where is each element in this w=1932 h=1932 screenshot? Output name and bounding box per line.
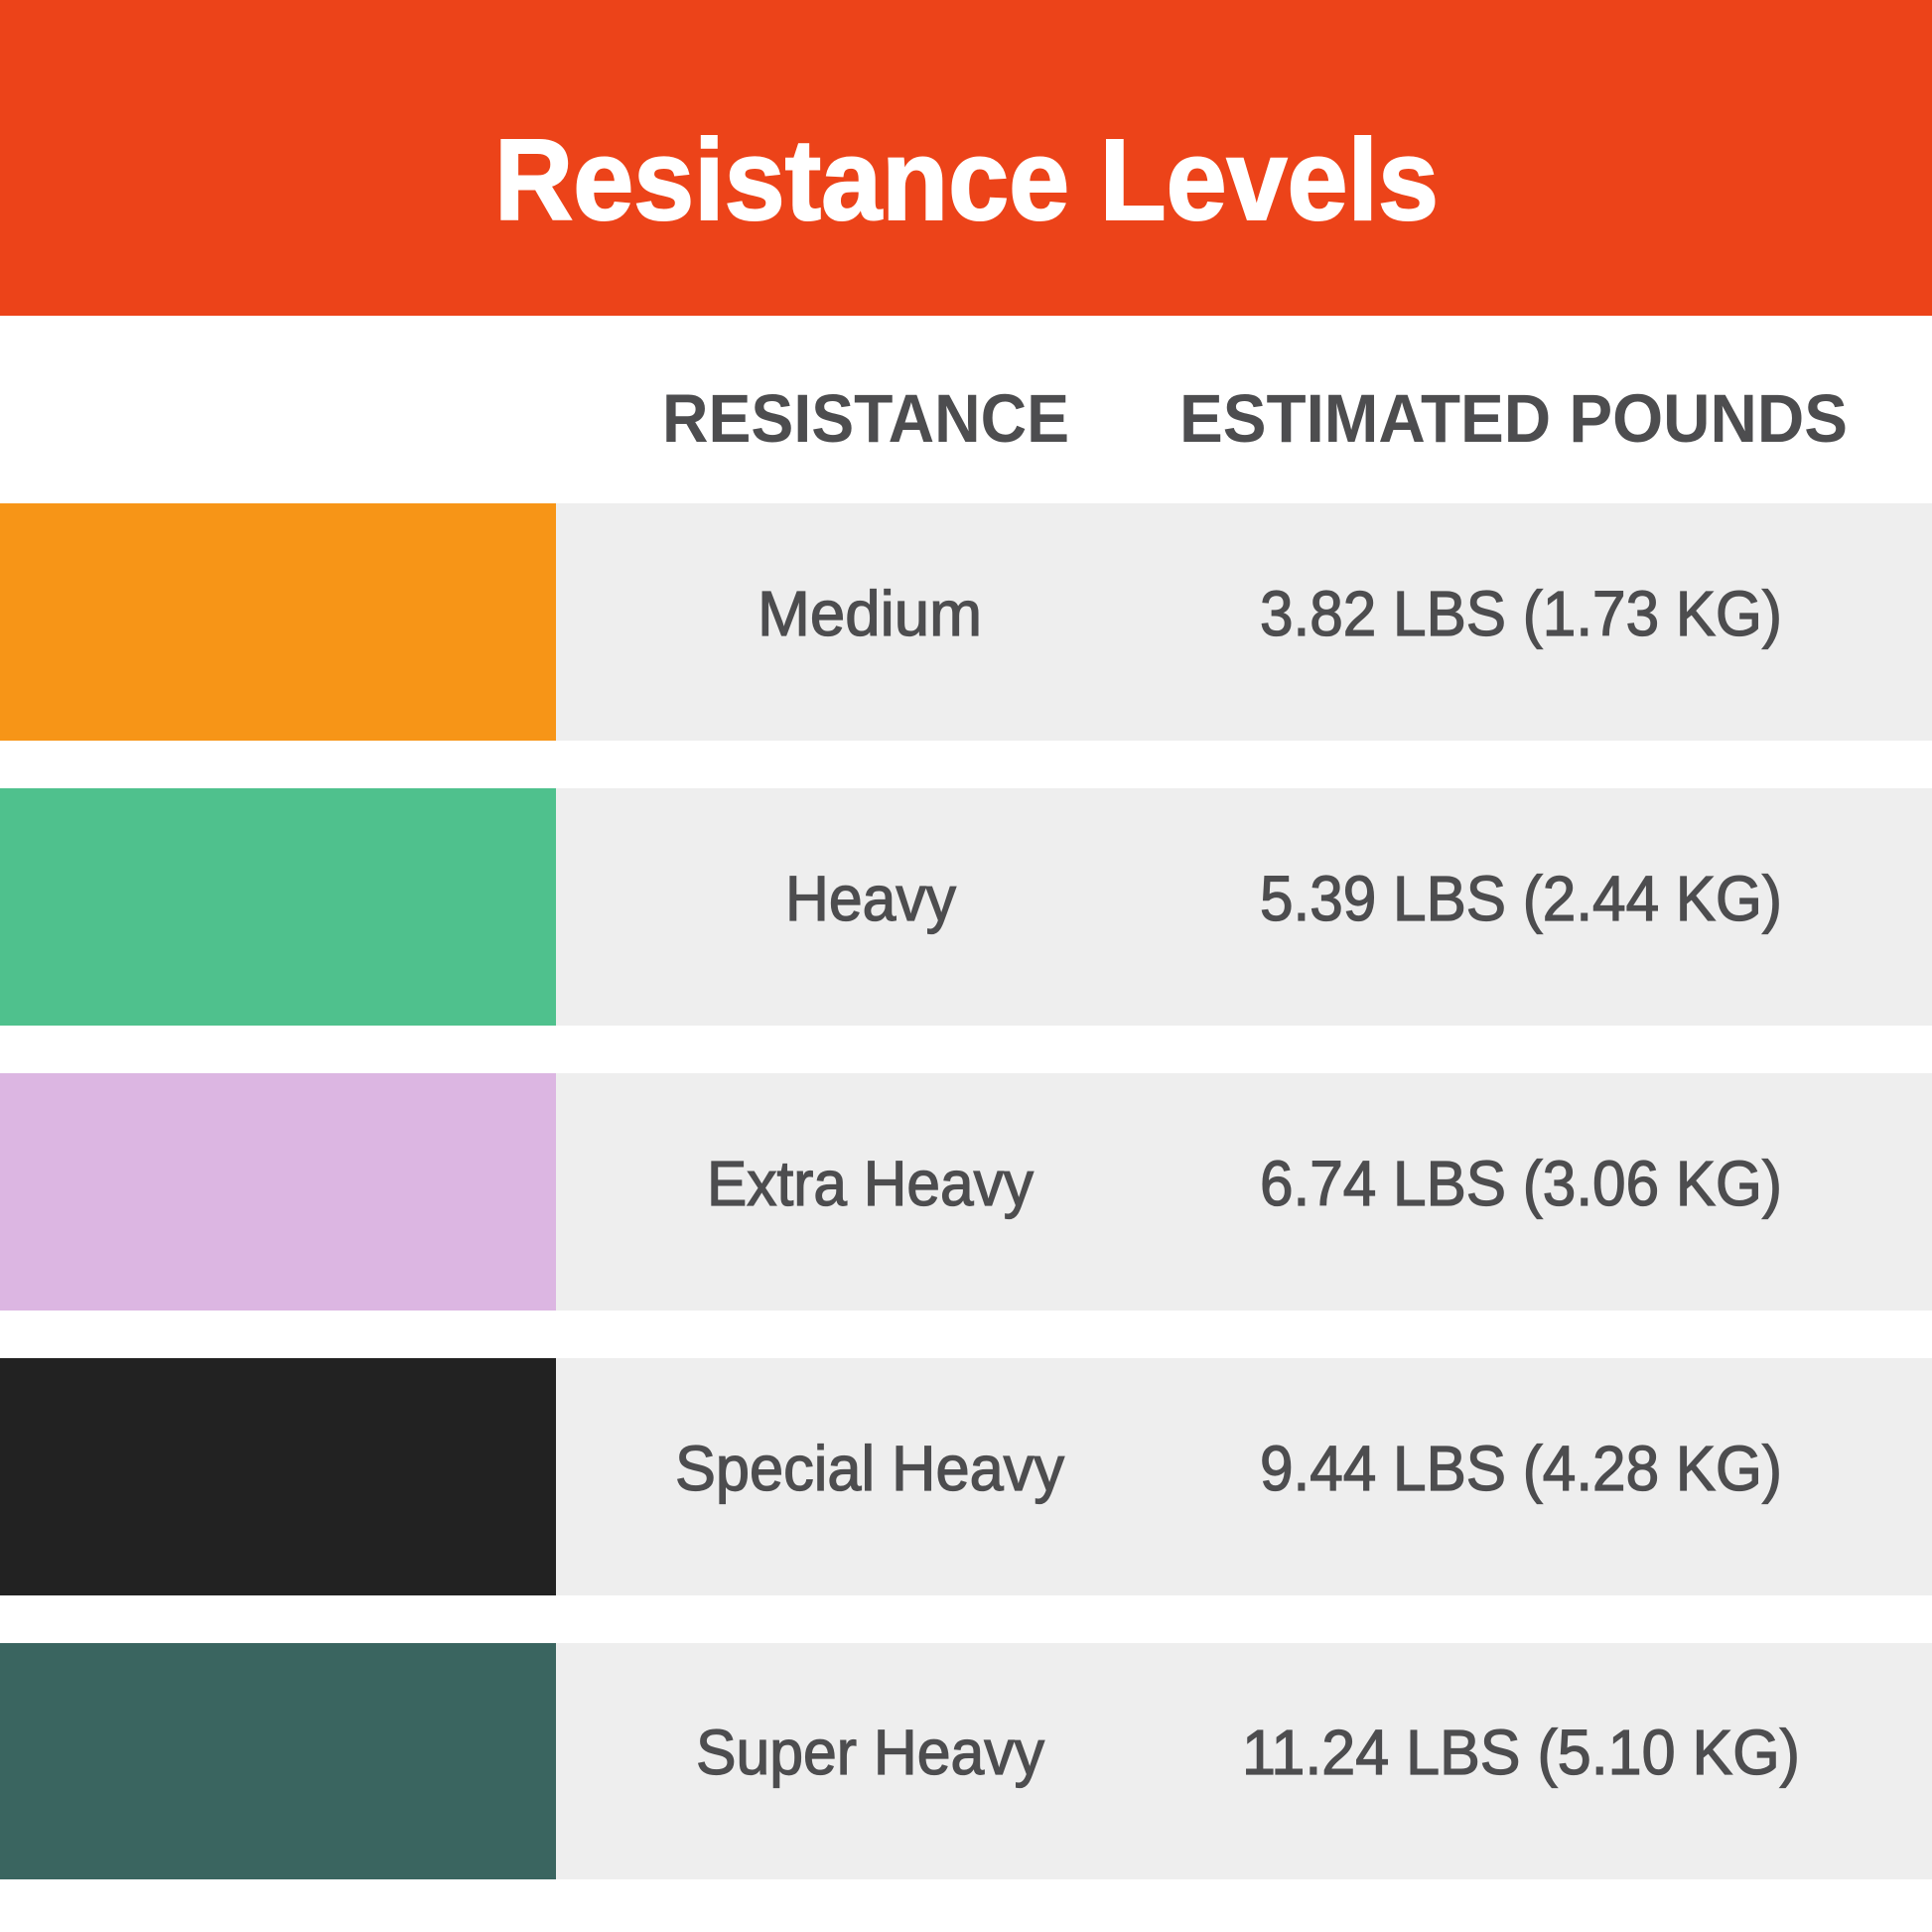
swatch: teal [0, 1643, 556, 1879]
label: medium: Medium [758, 578, 982, 649]
swatch: green [0, 788, 556, 1026]
value: extra heavy: 6.74 LBS (3.06 KG) [1260, 1148, 1782, 1219]
value: special heavy: 9.44 LBS (4.28 KG) [1260, 1433, 1782, 1504]
value: super heavy: 11.24 LBS (5.10 KG) [1242, 1717, 1800, 1788]
swatch: purple [0, 1073, 556, 1311]
label: extra heavy: Extra Heavy [707, 1148, 1034, 1219]
title: Resistance Levels [494, 115, 1439, 244]
row: special heavy [0, 1358, 1932, 1595]
column heading: resistance: RESISTANCE [662, 380, 1069, 457]
label: super heavy: Super Heavy [696, 1717, 1044, 1788]
label: special heavy: Special Heavy [675, 1433, 1064, 1504]
row: medium [0, 503, 1932, 741]
row: extra heavy [0, 1073, 1932, 1311]
column heading: estimated pounds: ESTIMATED POUNDS [1179, 380, 1848, 457]
value: medium: 3.82 LBS (1.73 KG) [1260, 578, 1782, 649]
row: heavy [0, 788, 1932, 1026]
swatch: orange [0, 503, 556, 741]
label: heavy: Heavy [785, 863, 956, 934]
value: heavy: 5.39 LBS (2.44 KG) [1260, 863, 1782, 934]
header banner [0, 0, 1932, 316]
row: super heavy [0, 1643, 1932, 1879]
swatch: black [0, 1358, 556, 1595]
